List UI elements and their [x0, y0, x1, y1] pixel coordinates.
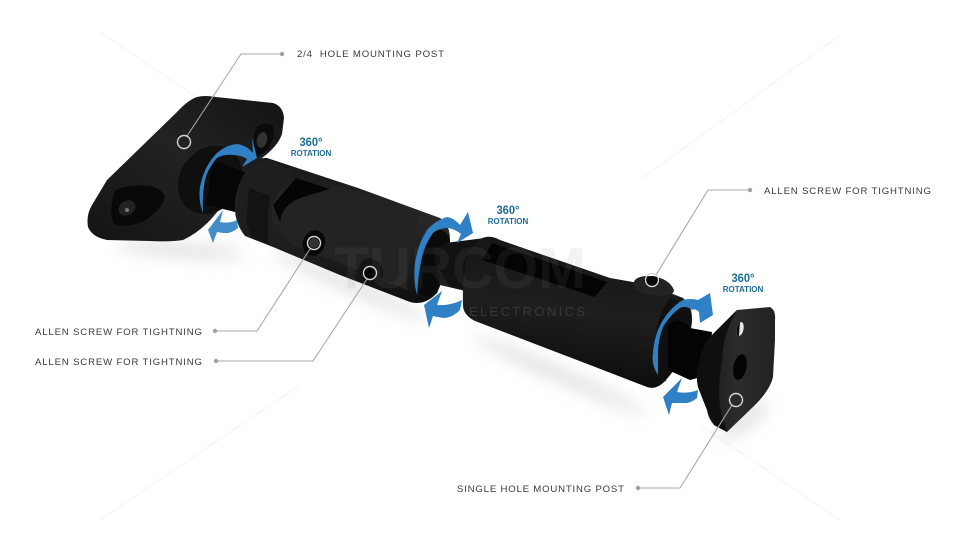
rotation label 3: ROTATION: [723, 285, 764, 294]
rotation arrow 1: [199, 138, 257, 243]
background faint lines: [100, 32, 840, 520]
callout: 2/4 hole mounting post: [178, 49, 444, 148]
callout: single hole mounting post: SINGLE HOLE MOUNTING POST: [457, 484, 624, 495]
rotation arrow 3: [653, 293, 713, 415]
second cylinder: [463, 237, 712, 388]
callout: single hole mounting post: [457, 394, 742, 495]
watermark: TURCOM: [334, 236, 586, 301]
callout: allen screw right: [646, 186, 931, 286]
watermark: ELECTRONICS: [469, 304, 585, 319]
rotation label 3: [723, 271, 764, 294]
callout: allen screw left 2: ALLEN SCREW FOR TIGHTNING: [35, 357, 202, 368]
connecting shaft: [433, 238, 490, 292]
callout: 2/4 hole mounting post: 2/4 HOLE MOUNTING POST: [297, 49, 444, 60]
first cylinder: [235, 158, 450, 303]
ground shadows: [115, 238, 773, 445]
rotation label 2: [488, 203, 529, 226]
rotation label 3: 360°: [732, 271, 755, 285]
right mounting plate: [697, 307, 775, 432]
callout: allen screw left 1: [35, 236, 320, 338]
callout: allen screw left 1: ALLEN SCREW FOR TIGHTNING: [35, 327, 202, 338]
rotation arrow 2: [414, 212, 473, 328]
rotation label 1: [291, 135, 332, 158]
rotation label 1: ROTATION: [291, 149, 332, 158]
rotation label 2: 360°: [496, 203, 520, 217]
callout: allen screw left 2: [35, 266, 376, 368]
left mounting plate: [88, 96, 284, 241]
rotation label 1: 360°: [300, 135, 323, 149]
rotation label 2: ROTATION: [488, 217, 529, 226]
callout: allen screw right: ALLEN SCREW FOR TIGHTNING: [764, 186, 931, 197]
